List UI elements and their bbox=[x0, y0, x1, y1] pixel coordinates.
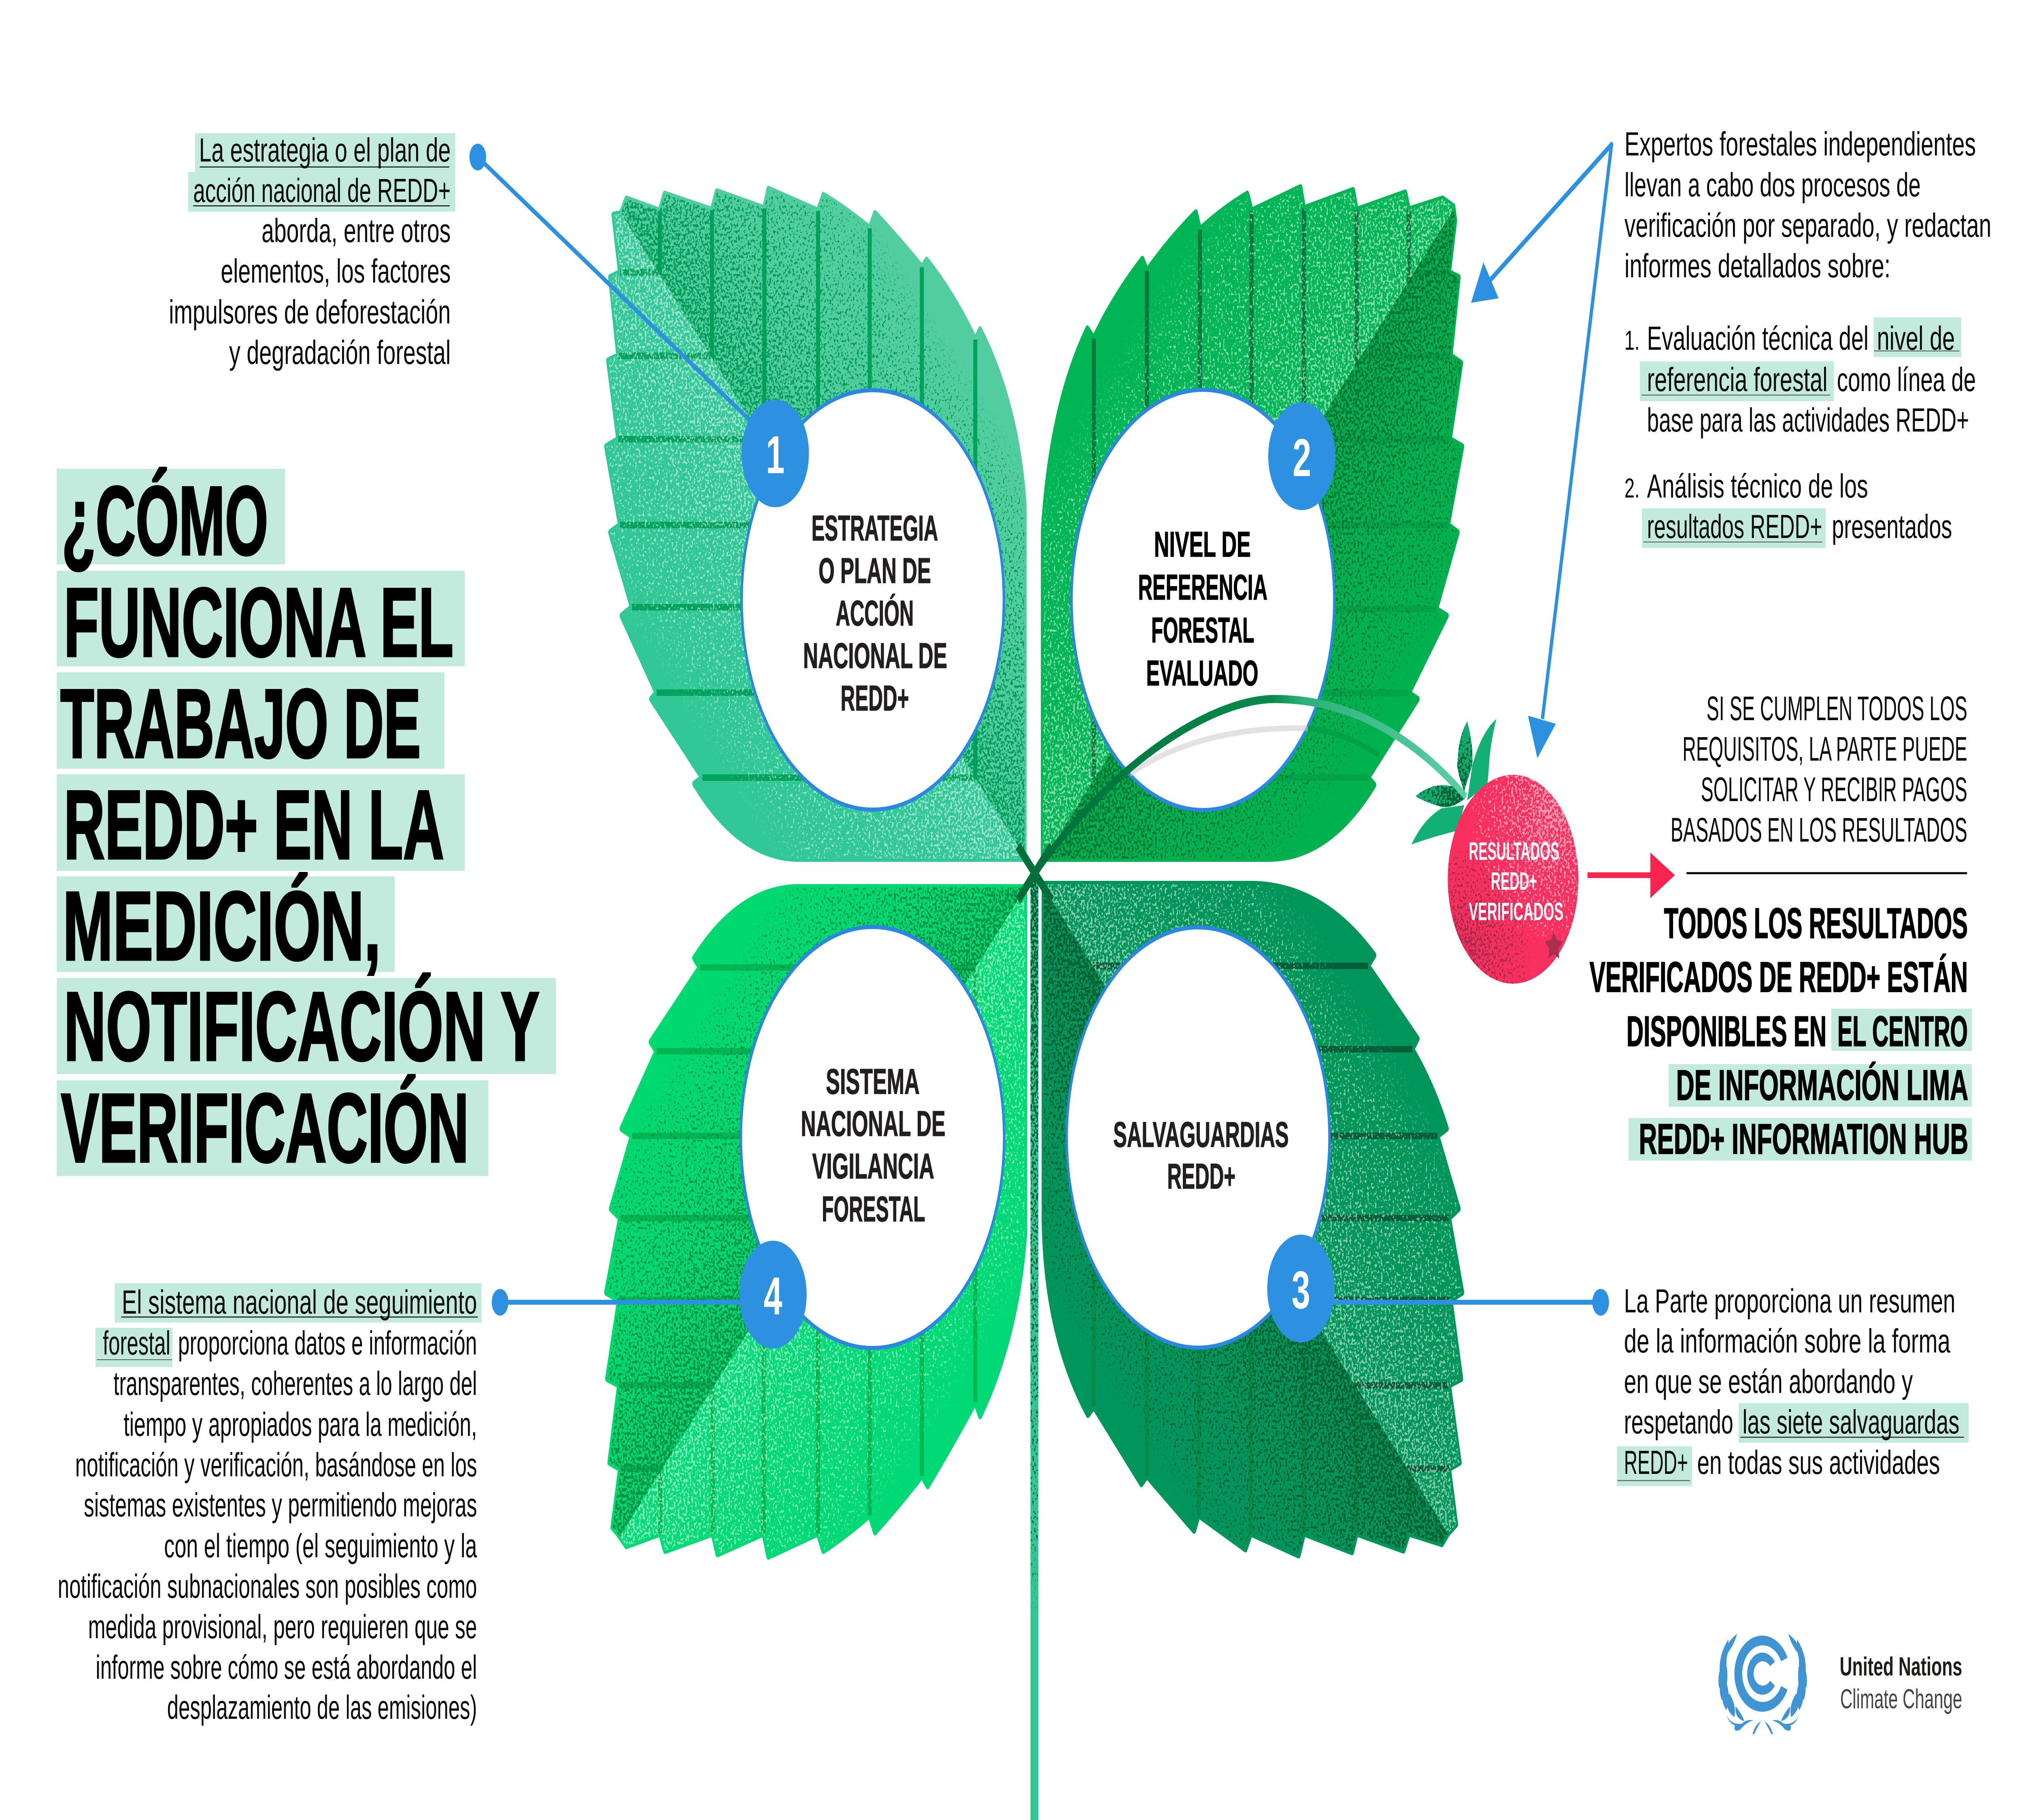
connector 3 bbox=[1332, 1289, 1609, 1316]
text block: verification: Evaluación técnica del bbox=[1647, 319, 1869, 357]
fruit crown bbox=[1412, 719, 1497, 844]
text block: strategy: aborda, entre otros bbox=[262, 211, 451, 249]
text block: forest monitoring system: desplazamiento de las emisiones) bbox=[167, 1688, 477, 1726]
circle 1: strategy: O PLAN DE bbox=[819, 551, 931, 591]
text block: forest monitoring system: notificación y verificación, basándose en los bbox=[75, 1446, 477, 1484]
title bbox=[57, 466, 556, 1183]
circle 3: safeguards bbox=[1067, 927, 1329, 1348]
text block: requirements bbox=[1671, 689, 1967, 849]
text block: forest monitoring system: El sistema nacional de seguimiento bbox=[122, 1283, 477, 1321]
text block: verification: 1. bbox=[1624, 325, 1640, 356]
text block: forest monitoring system: transparentes, coherentes a lo largo del bbox=[113, 1364, 477, 1402]
leaf 2 bbox=[1041, 184, 1465, 862]
title: NOTIFICACIÓN Y bbox=[64, 972, 540, 1081]
text block: verification: como línea de bbox=[1837, 360, 1976, 398]
text block: verification: 2. bbox=[1624, 473, 1640, 504]
text block: forest monitoring system: tiempo y apropiados para la medición, bbox=[123, 1405, 477, 1443]
text block: Lima hub: VERIFICADOS DE REDD+ ESTÁN bbox=[1590, 953, 1968, 1001]
text block: safeguards: en que se están abordando y bbox=[1624, 1362, 1913, 1400]
text block: requirements: SOLICITAR Y RECIBIR PAGOS bbox=[1701, 770, 1967, 808]
text block: verification: base para las actividades REDD+ bbox=[1647, 401, 1969, 439]
text block: safeguards: de la información sobre la forma bbox=[1624, 1322, 1950, 1360]
title: MEDICIÓN, bbox=[63, 871, 381, 981]
badge 4: 4 bbox=[764, 1266, 782, 1326]
text block: safeguards: las siete salvaguardas bbox=[1742, 1403, 1960, 1441]
text block: Lima hub bbox=[1590, 899, 1972, 1163]
circle 1: strategy: ACCIÓN bbox=[836, 593, 914, 633]
circle 2: forest reference level bbox=[1072, 390, 1334, 810]
leaf 3 bbox=[1042, 881, 1465, 1558]
text block: safeguards: en todas sus actividades bbox=[1697, 1443, 1940, 1481]
circle 4: monitoring: FORESTAL bbox=[822, 1189, 925, 1229]
circle 1: strategy: ESTRATEGIA bbox=[812, 508, 938, 548]
connector 1 bbox=[470, 144, 753, 423]
text block: strategy: La estrategia o el plan de bbox=[199, 131, 451, 169]
text block: verification: informes detallados sobre: bbox=[1624, 247, 1890, 285]
text block: Lima hub: EL CENTRO bbox=[1837, 1007, 1968, 1055]
connector 4 bbox=[492, 1289, 742, 1316]
logo: UN Climate Change bbox=[1718, 1634, 1962, 1734]
logo: UN Climate Change: United Nations bbox=[1840, 1652, 1962, 1681]
circle 4: monitoring: VIGILANCIA bbox=[812, 1146, 934, 1186]
text block: forest monitoring system: notificación subnacionales son posibles como bbox=[58, 1567, 477, 1605]
logo: UN Climate Change: Climate Change bbox=[1840, 1684, 1962, 1715]
leaf 1 bbox=[604, 186, 1027, 862]
text block: strategy: elementos, los factores bbox=[221, 252, 451, 290]
fruit: verified results bbox=[1448, 775, 1578, 984]
text block: safeguards bbox=[1617, 1282, 1969, 1486]
badge 3: 3 bbox=[1292, 1260, 1310, 1320]
text block: safeguards: respetando bbox=[1624, 1403, 1733, 1441]
text block: requirements: BASADOS EN LOS RESULTADOS bbox=[1671, 811, 1967, 849]
text block: verification: llevan a cabo dos procesos de bbox=[1624, 166, 1921, 204]
fruit: verified results: REDD+ bbox=[1491, 867, 1537, 895]
text block: verification: presentados bbox=[1832, 507, 1952, 545]
circle 1: strategy: REDD+ bbox=[841, 678, 909, 718]
leaf 4 bbox=[604, 884, 1027, 1560]
text block: strategy: acción nacional de REDD+ bbox=[193, 171, 451, 209]
text block: strategy bbox=[169, 131, 455, 371]
arrows: verification to leaf 2 and to results bbox=[1471, 145, 1612, 758]
text block: forest monitoring system: medida provisional, pero requieren que se bbox=[88, 1607, 477, 1646]
circle 1: strategy bbox=[742, 390, 1004, 810]
title: REDD+ EN LA bbox=[64, 770, 444, 880]
badge 1: 1 bbox=[766, 425, 785, 485]
text block: Lima hub: REDD+ INFORMATION HUB bbox=[1639, 1115, 1968, 1163]
text block: verification: referencia forestal bbox=[1647, 360, 1828, 398]
badge 3 bbox=[1267, 1235, 1335, 1342]
text block: verification: nivel de bbox=[1877, 319, 1955, 357]
circle 4: monitoring bbox=[741, 927, 1004, 1348]
text block: forest monitoring system: sistemas existentes y permitiendo mejoras bbox=[84, 1486, 477, 1524]
divider bbox=[1686, 872, 1967, 874]
circle 4: monitoring: SISTEMA bbox=[826, 1062, 920, 1101]
badge 2: 2 bbox=[1293, 428, 1311, 488]
text block: Lima hub: TODOS LOS RESULTADOS bbox=[1664, 899, 1968, 947]
red arrow bbox=[1588, 853, 1675, 898]
title: ¿CÓMO bbox=[62, 466, 268, 576]
fruit: verified results: VERIFICADOS bbox=[1469, 897, 1563, 925]
circle 2: forest reference level: NIVEL DE bbox=[1154, 525, 1251, 564]
text block: verification: Expertos forestales independientes bbox=[1624, 125, 1976, 163]
title: VERIFICACIÓN bbox=[61, 1073, 469, 1183]
stem bbox=[1031, 873, 1038, 1820]
text block: Lima hub: DISPONIBLES EN bbox=[1626, 1007, 1826, 1055]
text block: strategy: y degradación forestal bbox=[229, 333, 451, 371]
fruit: verified results: RESULTADOS bbox=[1469, 837, 1559, 865]
badge 1 bbox=[742, 400, 809, 507]
circle 3: safeguards: SALVAGUARDIAS bbox=[1113, 1115, 1289, 1155]
text block: strategy: impulsores de deforestación bbox=[169, 293, 451, 331]
text block: forest monitoring system bbox=[58, 1283, 482, 1726]
circle 1: strategy: NACIONAL DE bbox=[803, 636, 947, 676]
text block: verification: Análisis técnico de los bbox=[1647, 467, 1868, 505]
title: TRABAJO DE bbox=[60, 669, 421, 778]
circle 2: forest reference level: REFERENCIA bbox=[1138, 568, 1267, 607]
text block: requirements: SI SE CUMPLEN TODOS LOS bbox=[1707, 689, 1967, 727]
text block: verification: verificación por separado, y redactan bbox=[1624, 206, 1991, 244]
text block: Lima hub: DE INFORMACIÓN LIMA bbox=[1676, 1061, 1968, 1109]
badge 2 bbox=[1268, 402, 1335, 510]
circle 2: forest reference level: EVALUADO bbox=[1146, 653, 1259, 693]
text block: verification bbox=[1624, 125, 1991, 548]
text block: forest monitoring system: forestal bbox=[103, 1324, 170, 1362]
text block: forest monitoring system: proporciona datos e información bbox=[178, 1324, 477, 1362]
badge 4 bbox=[739, 1241, 807, 1348]
circle 3: safeguards: REDD+ bbox=[1167, 1157, 1235, 1196]
text block: forest monitoring system: informe sobre cómo se está abordando el bbox=[96, 1648, 477, 1686]
title: FUNCIONA EL bbox=[64, 568, 453, 677]
stem crossing bbox=[1018, 846, 1052, 900]
text block: safeguards: La Parte proporciona un resumen bbox=[1624, 1282, 1955, 1320]
circle 4: monitoring: NACIONAL DE bbox=[801, 1104, 946, 1144]
circle 2: forest reference level: FORESTAL bbox=[1151, 610, 1254, 650]
text block: verification: resultados REDD+ bbox=[1647, 507, 1822, 545]
text block: forest monitoring system: con el tiempo (el seguimiento y la bbox=[164, 1527, 477, 1565]
text block: requirements: REQUISITOS, LA PARTE PUEDE bbox=[1682, 730, 1967, 768]
fruit stalk bbox=[1035, 699, 1466, 873]
text block: safeguards: REDD+ bbox=[1624, 1443, 1688, 1481]
